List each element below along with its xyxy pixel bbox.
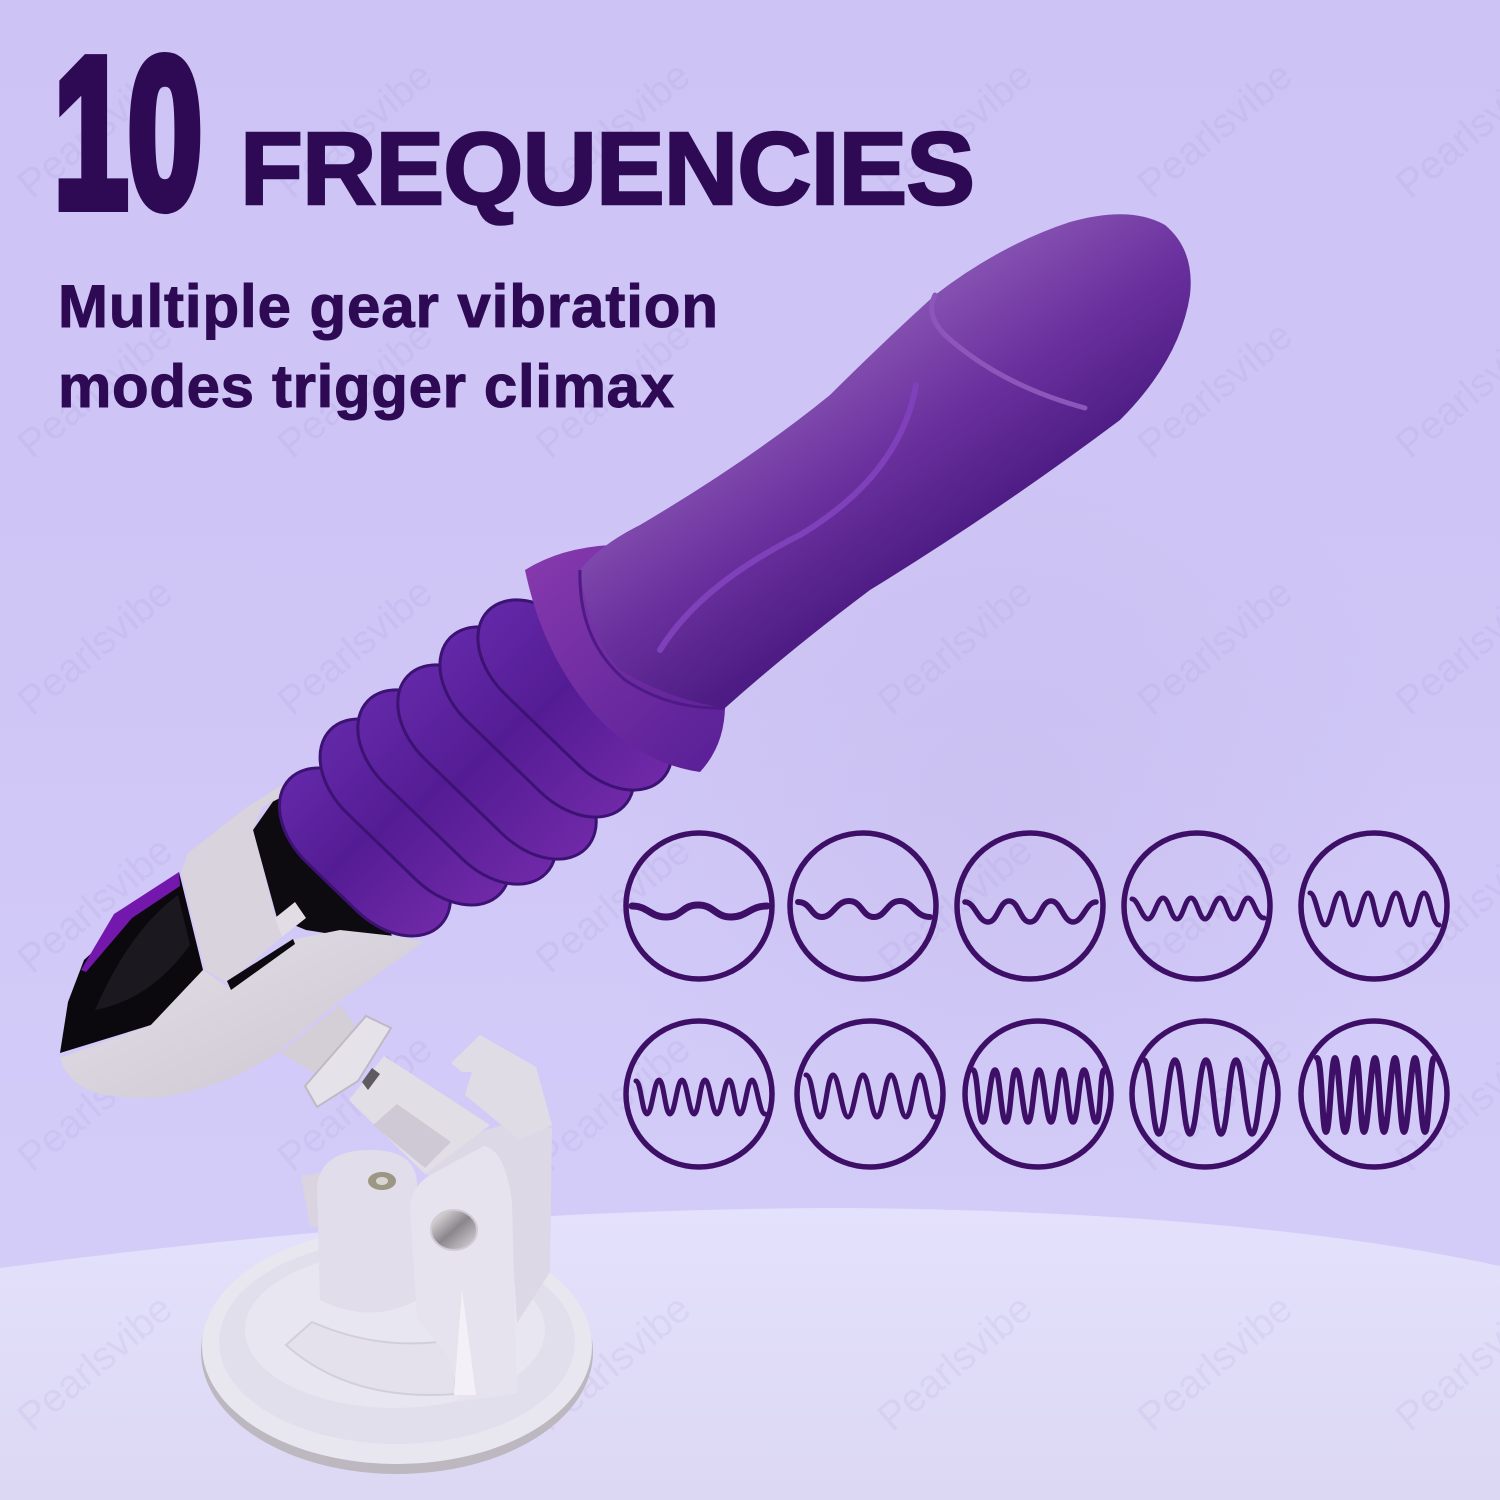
- bracket spike: [454, 1290, 476, 1395]
- shaft ridge: [932, 295, 1085, 408]
- mount bracket plate: [410, 1146, 517, 1402]
- knurled knob: [305, 1016, 391, 1107]
- slot: [227, 939, 295, 990]
- mode icon 9: [1132, 1021, 1278, 1167]
- mode icon 4: [1124, 833, 1270, 979]
- mode icon 10: [1301, 1021, 1447, 1167]
- title word: FREQUENCIES: [240, 111, 975, 226]
- watermark pattern: Pearlsvibe: [870, 828, 1041, 982]
- floor surface: [0, 1208, 1500, 1500]
- watermark pattern: Pearlsvibe: [270, 1026, 441, 1180]
- watermark pattern: Pearlsvibe: [10, 1286, 181, 1440]
- mount arm head: [349, 1056, 490, 1174]
- watermark pattern: Pearlsvibe: [528, 53, 699, 207]
- mode icon 2: [790, 833, 936, 979]
- watermark pattern: Pearlsvibe: [870, 1286, 1041, 1440]
- watermark pattern: Pearlsvibe: [528, 1286, 699, 1440]
- mount post: [301, 1150, 417, 1312]
- title number: 10: [54, 14, 202, 251]
- mode icon 5: [1301, 833, 1447, 979]
- shaft vein: [660, 385, 916, 650]
- watermark pattern: Pearlsvibe: [10, 570, 181, 724]
- watermark pattern: Pearlsvibe: [270, 53, 441, 207]
- mode icon 3: [957, 833, 1103, 979]
- mount body behind plate: [425, 1120, 552, 1323]
- watermark pattern: Pearlsvibe: [528, 1026, 699, 1180]
- collar rim: [580, 570, 725, 708]
- watermark pattern: Pearlsvibe: [870, 53, 1041, 207]
- product: suction mount: [201, 1035, 593, 1474]
- watermark pattern: Pearlsvibe: [1130, 313, 1301, 467]
- subtitle text: modes trigger climax: [58, 353, 674, 420]
- mode icon 8: [965, 1021, 1111, 1167]
- purple control strip: [81, 872, 180, 972]
- mount top hook: [451, 1035, 552, 1140]
- watermark pattern: Pearlsvibe: [1130, 570, 1301, 724]
- watermark pattern: Pearlsvibe: [10, 1026, 181, 1180]
- watermark pattern: Pearlsvibe: [528, 313, 699, 467]
- watermark pattern: Pearlsvibe: [1130, 1026, 1301, 1180]
- black motor tip: [60, 872, 203, 1053]
- neck swivel: [280, 1005, 362, 1081]
- subtitle text: Multiple gear vibration: [58, 273, 718, 340]
- latch: [275, 902, 306, 937]
- product: handle and housing: [60, 780, 423, 1107]
- mode icon 7: [797, 1021, 943, 1167]
- gloss highlight: [95, 895, 190, 1010]
- watermark pattern: Pearlsvibe: [10, 313, 181, 467]
- mount step: [286, 1322, 456, 1395]
- watermark pattern: Pearlsvibe: [528, 828, 699, 982]
- watermark pattern: Pearlsvibe: [1130, 1286, 1301, 1440]
- black neck: [253, 780, 395, 944]
- white lower shell: [60, 930, 423, 1098]
- watermark pattern: Pearlsvibe: [1130, 53, 1301, 207]
- watermark pattern: Pearlsvibe: [270, 313, 441, 467]
- mode icon 6: [626, 1021, 772, 1167]
- product: collar: [525, 545, 725, 772]
- suction cup base: [201, 1230, 593, 1474]
- frequency icons: [626, 833, 1447, 1167]
- watermark pattern: Pearlsvibe: [270, 570, 441, 724]
- mode icon 1: [626, 833, 772, 979]
- product: purple shaft: [580, 214, 1191, 708]
- subtitle text: [58, 273, 718, 420]
- watermark pattern: Pearlsvibe: [1130, 828, 1301, 982]
- white band: [181, 781, 290, 983]
- bracket bolt: [431, 1210, 477, 1250]
- watermark pattern: Pearlsvibe: [10, 53, 181, 207]
- watermark pattern: Pearlsvibe: [10, 828, 181, 982]
- product: ribbed purple sleeve: [256, 576, 695, 959]
- title: [54, 14, 975, 251]
- watermark pattern: Pearlsvibe: [870, 570, 1041, 724]
